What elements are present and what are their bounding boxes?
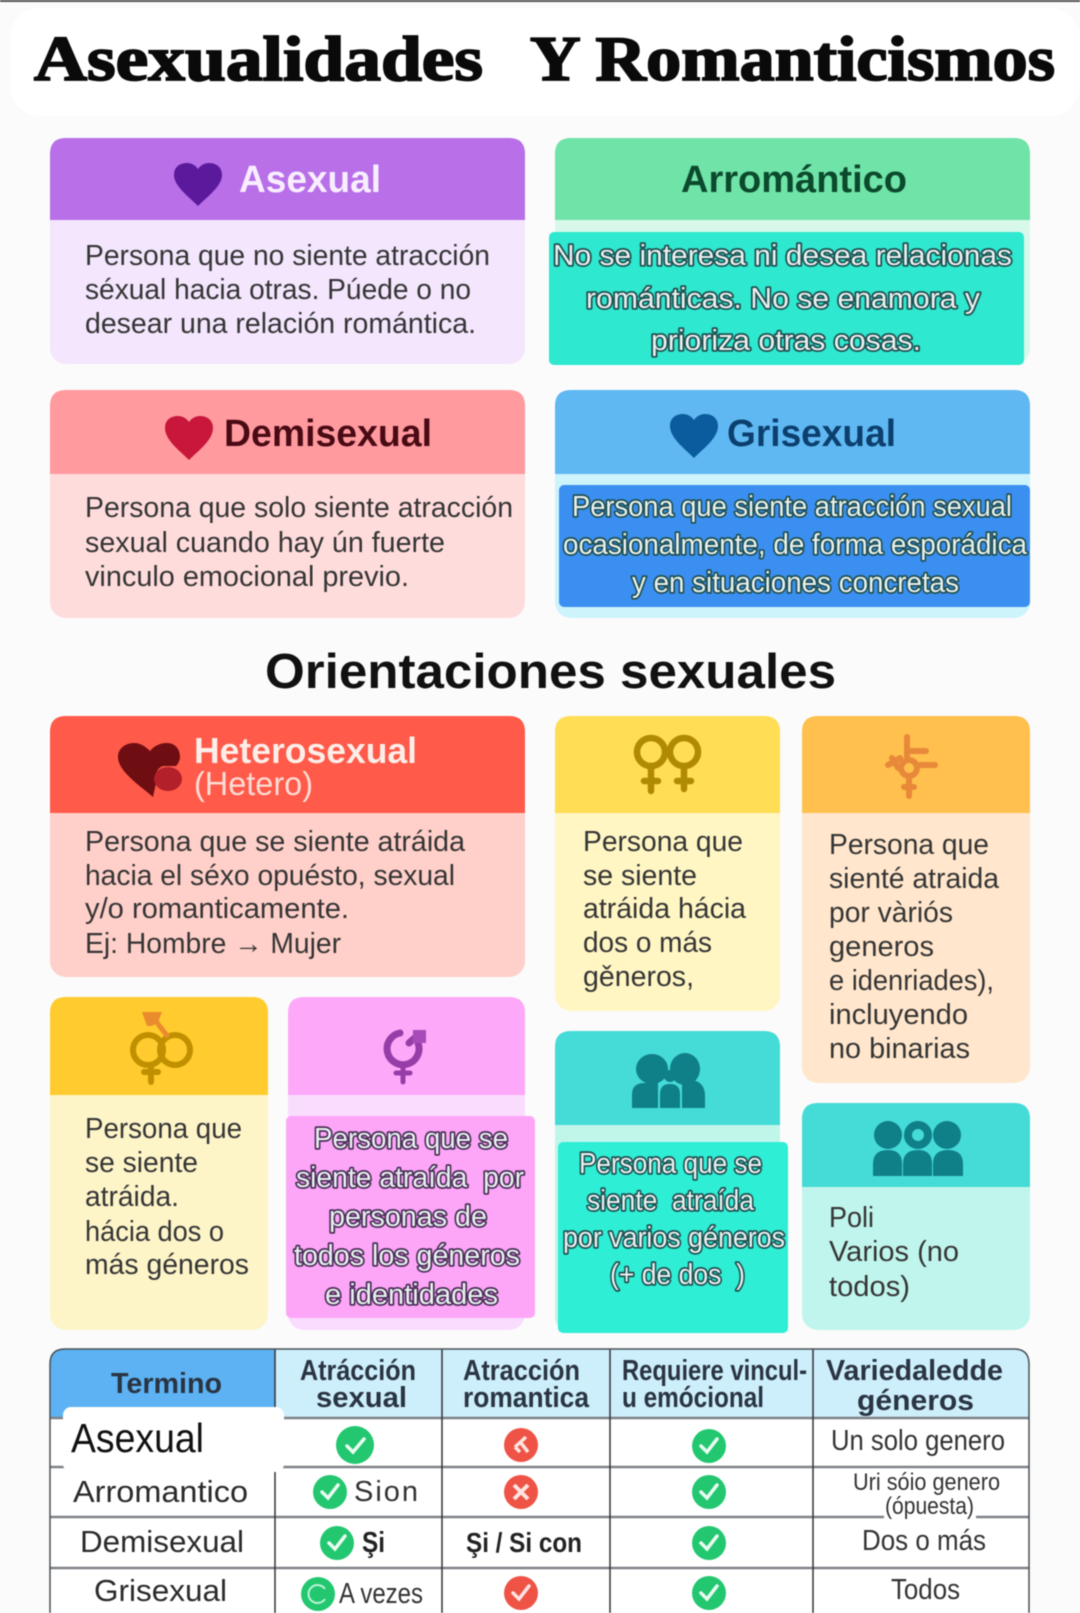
panel: pink: e identidades	[325, 1279, 498, 1311]
panel: arromantico: prioriza otras cosas.	[651, 325, 921, 357]
panel: orange multi-gender: no binarias	[829, 1033, 970, 1065]
panel: yellow left: se siente	[85, 1147, 198, 1179]
table header row: Atracción	[463, 1355, 580, 1387]
panel: teal couple: (+ de dos )	[610, 1259, 745, 1291]
panel: orange multi-gender: generos	[829, 931, 934, 963]
table header row: sexual	[316, 1382, 407, 1414]
panel: teal couple: por varios géneros	[563, 1222, 785, 1254]
panel: pink: personas de	[329, 1201, 487, 1233]
row: grisexual: A vezes	[339, 1578, 423, 1610]
table header row: Variedaledde	[826, 1355, 1003, 1387]
panel: demisexual: Persona que solo siente atracción	[85, 492, 513, 524]
panel: arromantico: No se interesa ni desea relacionas	[553, 240, 1012, 272]
table header row	[50, 1349, 1029, 1418]
table header row: u emócional	[622, 1382, 764, 1414]
row: arromantico: Uri sóio genero	[853, 1469, 1000, 1496]
table header row: romantica	[463, 1382, 590, 1414]
panel: yellow left: más géneros	[85, 1249, 249, 1281]
panel: asexual: desear una relación romántica.	[85, 308, 476, 340]
panel: orange multi-gender: por vàriós	[829, 897, 953, 929]
panel: poli	[802, 1103, 1030, 1330]
panel: poli: todos)	[829, 1271, 910, 1303]
title	[10, 8, 1080, 116]
panel: heterosexual: hacia el séxo opuésto, sexual	[85, 860, 455, 892]
row: asexual	[63, 1407, 1005, 1472]
row: arromantico: Arromantico	[73, 1474, 248, 1509]
panel: asexual: séxual hacia otras. Púede o no	[85, 274, 471, 306]
panel: asexual: Asexual	[239, 159, 381, 201]
row: asexual: Un solo genero	[831, 1425, 1005, 1457]
panel: orange multi-gender: e idenriades),	[829, 965, 994, 997]
panel: arromantico: románticas. No se enamora y	[586, 283, 981, 315]
panel: orange multi-gender	[802, 716, 1030, 1083]
panel: demisexual	[50, 390, 525, 618]
row: arromantico: (ópuesta)	[885, 1493, 974, 1520]
panel: pink: siente atraída por	[296, 1162, 524, 1194]
panel: bisexual yellow	[555, 716, 780, 1011]
row: asexual: Asexual	[71, 1415, 204, 1461]
panel: heterosexual: y/o romanticamente.	[85, 893, 349, 925]
title: Asexualidades	[34, 24, 483, 94]
row: demisexual: Demisexual	[80, 1524, 244, 1559]
panel: demisexual: vinculo emocional previo.	[85, 561, 409, 593]
panel: teal couple: Persona que se	[579, 1148, 762, 1180]
table header row: Atrácción	[300, 1355, 416, 1387]
panel: grisexual: ocasionalmente, de forma esporádica	[563, 529, 1028, 561]
panel: bisexual yellow: Persona que	[583, 826, 743, 858]
table header row: géneros	[857, 1385, 974, 1417]
panel: grisexual	[555, 390, 1030, 618]
panel: orange multi-gender: incluyendo	[829, 999, 968, 1031]
panel: orange multi-gender: Persona que	[829, 829, 989, 861]
panel: yellow left: hácia dos o	[85, 1216, 224, 1248]
panel: poli: Poli	[829, 1202, 874, 1234]
panel: bisexual yellow: se siente	[583, 860, 697, 892]
panel: asexual: Persona que no siente atracción	[85, 240, 490, 272]
panel: bisexual yellow: atráida hácia	[583, 893, 746, 925]
row: grisexual: Grisexual	[94, 1573, 227, 1608]
row: arromantico: Sion	[354, 1476, 418, 1508]
heading: orientaciones sexuales: Orientaciones sexuales	[265, 645, 836, 699]
panel: yellow left	[50, 997, 268, 1330]
table header row: Termino	[111, 1368, 222, 1400]
panel: heterosexual: Persona que se siente atráida	[85, 826, 465, 858]
panel: poli: Varios (no	[829, 1236, 959, 1268]
panel: orange multi-gender: sienté atraida	[829, 863, 999, 895]
panel: grisexual: y en situaciones concretas	[632, 567, 959, 599]
comparison table	[50, 1349, 1029, 1613]
row: arromantico	[73, 1469, 1000, 1520]
panel: asexual	[50, 138, 525, 364]
row: demisexual: Dos o más	[862, 1525, 986, 1557]
panel: pink: todos los géneros	[294, 1240, 520, 1272]
panel: heterosexual: (Hetero)	[194, 765, 313, 802]
panel: bisexual yellow: gěneros,	[583, 961, 694, 993]
panel: demisexual: sexual cuando hay ún fuerte	[85, 527, 445, 559]
panel: arromantico	[549, 138, 1030, 365]
panel: grisexual: Persona que siente atracción sexual	[572, 491, 1012, 523]
row: demisexual	[80, 1524, 986, 1560]
panel: bisexual yellow: dos o más	[583, 927, 712, 959]
panel: pink: Persona que se	[314, 1123, 508, 1155]
title: Y Romanticismos	[530, 24, 1055, 94]
row: demisexual: Şi	[362, 1527, 385, 1559]
panel: heterosexual: Heterosexual	[194, 730, 417, 771]
panel: yellow left: atráida.	[85, 1181, 179, 1213]
panel: demisexual: Demisexual	[224, 413, 432, 455]
row: grisexual: Todos	[891, 1574, 960, 1606]
panel: teal couple	[555, 1031, 788, 1333]
panel: arromantico: Arromántico	[681, 159, 907, 201]
panel: yellow left: Persona que	[85, 1113, 242, 1145]
table header row: Requiere vincul-	[622, 1355, 807, 1387]
row: demisexual: Şi / Si con	[466, 1527, 582, 1558]
panel: teal couple: siente atraída	[587, 1185, 755, 1217]
panel: heterosexual	[50, 716, 525, 977]
panel: heterosexual: Ej: Hombre → Mujer	[85, 928, 341, 960]
row: grisexual	[94, 1573, 960, 1611]
panel: grisexual: Grisexual	[727, 413, 896, 455]
panel: pink	[286, 997, 535, 1330]
